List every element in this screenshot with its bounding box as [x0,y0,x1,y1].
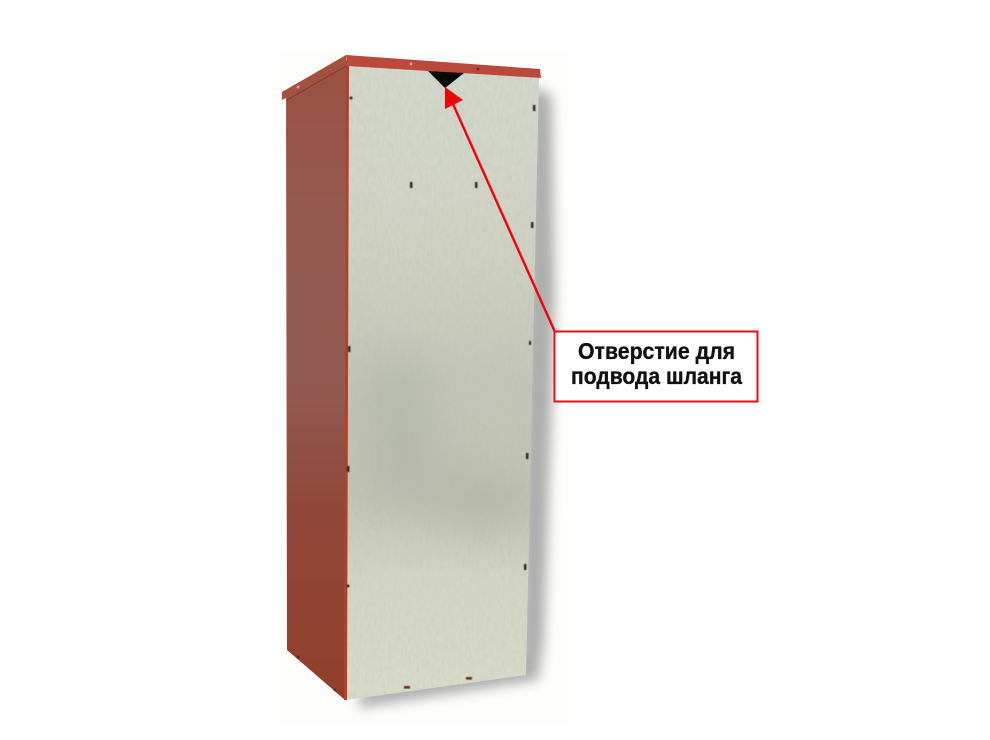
callout: подвода шланга [571,363,742,389]
red edge strip [344,66,349,700]
panel: galvanized back [346,66,540,700]
callout [554,332,758,402]
panel: red roof lid [346,55,541,78]
lid shadow line [287,66,346,100]
callout: Отверстие для [578,338,735,364]
photo background [280,52,568,725]
cabinet [282,55,541,700]
drop shadow [358,85,555,708]
icon: black triangular hose opening [428,71,464,88]
arrow: red pointer to the opening [445,87,555,332]
panel: red side wall [286,60,347,700]
fastener holes [297,63,535,691]
